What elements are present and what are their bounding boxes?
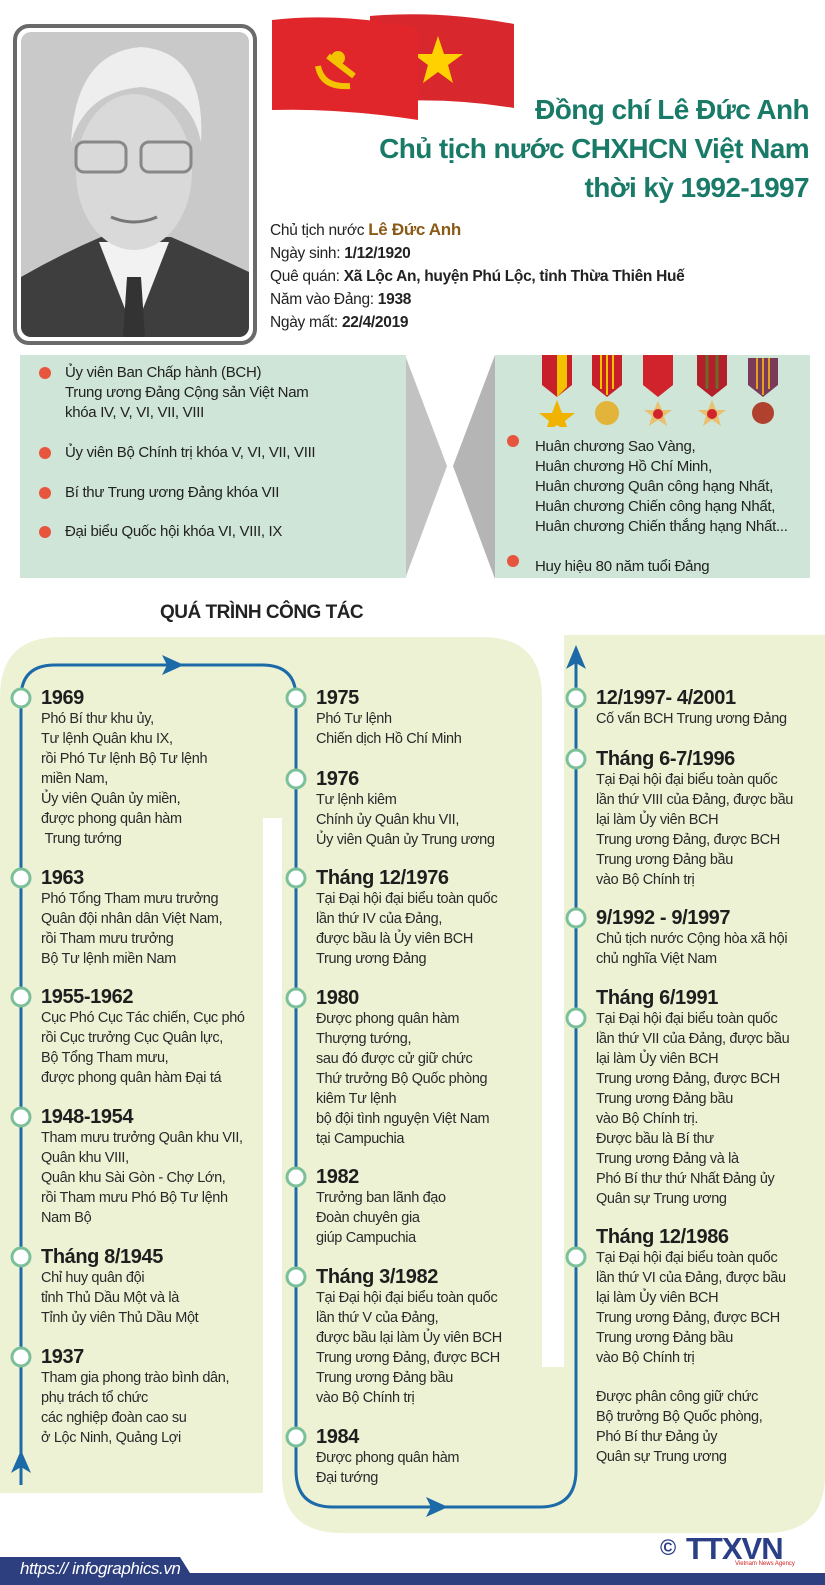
- text: 1980: [316, 987, 359, 1009]
- timeline: right column: [596, 687, 787, 727]
- logo: TTXVN: ©: [660, 1535, 676, 1560]
- text: Trưởng ban lãnh đạo: [316, 1190, 446, 1206]
- panel: awards: Huân chương Quân công hạng Nhất,: [535, 478, 773, 495]
- text: 9/1992 - 9/1997: [596, 907, 730, 929]
- text: được bầu lại làm Ủy viên BCH: [316, 1330, 502, 1346]
- timeline: left column: Ủy viên Quân ủy miền,: [41, 791, 180, 807]
- text: phụ trách tổ chức: [41, 1390, 148, 1406]
- panel: awards: Huân chương Hồ Chí Minh,: [535, 458, 712, 475]
- title: thời kỳ 1992-1997: [584, 172, 809, 203]
- text: Trung ương Đảng bầu: [596, 1091, 733, 1107]
- panel: awards: Huy hiệu 80 năm tuổi Đảng: [535, 558, 709, 575]
- heading: quá trình công tác: QUÁ TRÌNH CÔNG TÁC: [160, 602, 363, 623]
- connector X shape: [405, 355, 495, 579]
- timeline: left column: Tư lệnh Quân khu IX,: [41, 731, 173, 747]
- panel: positions: Ủy viên Ban Chấp hành (BCH): [65, 364, 261, 381]
- text: Tháng 12/1986: [596, 1226, 729, 1248]
- text: Tháng 8/1945: [41, 1246, 163, 1268]
- panel: positions: Ủy viên Bộ Chính trị khóa V, VI, VII, VIII: [65, 444, 315, 461]
- text: 1982: [316, 1166, 359, 1188]
- panel: positions: Trung ương Đảng Cộng sản Việt Nam: [65, 384, 308, 401]
- panel: awards: Huân chương Chiến công hạng Nhất,: [535, 498, 775, 515]
- title: [379, 94, 809, 203]
- text: Quân khu VIII,: [41, 1150, 129, 1166]
- text: Chủ tịch nước Cộng hòa xã hội: [596, 931, 787, 947]
- logo: TTXVN: TTXVN: [686, 1531, 783, 1566]
- text: Bộ Tổng Tham mưu,: [41, 1050, 168, 1066]
- panel: awards: Huân chương Chiến thắng hạng Nhất...: [535, 518, 788, 535]
- text: Quân sự Trung ương: [596, 1449, 727, 1465]
- personal info: Năm vào Đảng: 1938: [270, 291, 411, 308]
- text: Bộ Tư lệnh miền Nam: [41, 951, 176, 967]
- text: Thứ trưởng Bộ Quốc phòng: [316, 1071, 487, 1087]
- text: 1948-1954: [41, 1106, 133, 1128]
- text: bộ đội tình nguyện Việt Nam: [316, 1111, 489, 1127]
- text: Trung ương Đảng và là: [596, 1151, 739, 1167]
- text: lần thứ IV của Đảng,: [316, 911, 442, 927]
- personal info: Ngày sinh: 1/12/1920: [270, 245, 411, 262]
- text: được phong quân hàm Đại tá: [41, 1070, 221, 1086]
- text: vào Bộ Chính trị: [596, 1350, 694, 1366]
- timeline: middle column: Chiến dịch Hồ Chí Minh: [316, 731, 461, 747]
- flag: vietnam: [370, 14, 514, 108]
- text: Quân đội nhân dân Việt Nam,: [41, 911, 222, 927]
- text: 1984: [316, 1426, 359, 1448]
- text: Được bầu là Bí thư: [596, 1131, 714, 1147]
- text: Trung ương Đảng, được BCH: [316, 1350, 500, 1366]
- timeline: right column: Cố vấn BCH Trung ương Đảng: [596, 711, 787, 727]
- text: vào Bộ Chính trị: [596, 872, 694, 888]
- footer: [0, 1557, 825, 1585]
- timeline: left column: [41, 687, 207, 847]
- timeline: middle column: [316, 687, 461, 747]
- personal info: Quê quán: Xã Lộc An, huyện Phú Lộc, tỉnh Thừa Thiên Huế: [270, 268, 684, 285]
- text: 1937: [41, 1346, 84, 1368]
- panel: positions: [20, 355, 406, 578]
- text: Bộ trưởng Bộ Quốc phòng,: [596, 1409, 762, 1425]
- text: lại làm Ủy viên BCH: [596, 1290, 718, 1306]
- icon: medals: [539, 355, 778, 427]
- text: Nam Bộ: [41, 1210, 91, 1226]
- flag: party: [272, 17, 418, 120]
- text: sau đó được cử giữ chức: [316, 1051, 472, 1067]
- text: giúp Campuchia: [316, 1230, 416, 1246]
- title: Chủ tịch nước CHXHCN Việt Nam: [379, 133, 809, 164]
- timeline: left column: Trung tướng: [45, 831, 122, 847]
- text: lần thứ VII của Đảng, được bầu: [596, 1031, 789, 1047]
- timeline: middle column: Phó Tư lệnh: [316, 711, 392, 727]
- text: Tại Đại hội đại biểu toàn quốc: [316, 891, 497, 907]
- text: tỉnh Thủ Dầu Một và là: [41, 1290, 179, 1306]
- text: vào Bộ Chính trị.: [596, 1111, 698, 1127]
- text: lần thứ VIII của Đảng, được bầu: [596, 792, 793, 808]
- text: Chính ủy Quân khu VII,: [316, 812, 459, 828]
- text: 1963: [41, 867, 84, 889]
- text: các nghiệp đoàn cao su: [41, 1410, 186, 1426]
- text: Ủy viên Quân ủy Trung ương: [316, 832, 495, 848]
- text: rồi Tham mưu trưởng: [41, 931, 173, 947]
- text: Trung ương Đảng, được BCH: [596, 832, 780, 848]
- timeline: left column: được phong quân hàm: [41, 811, 182, 827]
- text: lần thứ V của Đảng,: [316, 1310, 438, 1326]
- flags: [272, 14, 514, 120]
- text: Trung ương Đảng bầu: [596, 852, 733, 868]
- text: vào Bộ Chính trị: [316, 1390, 414, 1406]
- footer: https:// infographics.vn: [20, 1559, 180, 1578]
- text: Quân sự Trung ương: [596, 1191, 727, 1207]
- text: Tại Đại hội đại biểu toàn quốc: [596, 1011, 777, 1027]
- timeline: left column: rồi Phó Tư lệnh Bộ Tư lệnh: [41, 751, 207, 767]
- text: Cục Phó Cục Tác chiến, Cục phó: [41, 1010, 245, 1026]
- text: Thượng tướng,: [316, 1031, 411, 1047]
- text: được bầu là Ủy viên BCH: [316, 931, 473, 947]
- text: Tháng 3/1982: [316, 1266, 438, 1288]
- text: Phó Tổng Tham mưu trưởng: [41, 891, 218, 907]
- timeline: left column: Phó Bí thư khu ủy,: [41, 711, 154, 727]
- text: lần thứ VI của Đảng, được bầu: [596, 1270, 786, 1286]
- title: Đồng chí Lê Đức Anh: [535, 94, 809, 125]
- panel: awards: [495, 355, 810, 578]
- text: Trung ương Đảng, được BCH: [596, 1310, 780, 1326]
- logo: TTXVN: Vietnam News Agency: [735, 1561, 795, 1567]
- text: rồi Cục trưởng Cục Quân lực,: [41, 1030, 223, 1046]
- text: lại làm Ủy viên BCH: [596, 812, 718, 828]
- text: Tư lệnh kiêm: [316, 792, 396, 808]
- personal info: [270, 220, 685, 331]
- timeline: right column: 12/1997- 4/2001: [596, 687, 736, 709]
- text: Được phong quân hàm: [316, 1011, 459, 1027]
- text: Tháng 12/1976: [316, 867, 449, 889]
- text: 1955-1962: [41, 986, 133, 1008]
- text: kiêm Tư lệnh: [316, 1091, 396, 1107]
- text: Tham gia phong trào bình dân,: [41, 1370, 229, 1386]
- text: Phó Bí thư Đảng ủy: [596, 1429, 717, 1445]
- text: Phó Bí thư thứ Nhất Đảng ủy: [596, 1171, 774, 1187]
- text: 1976: [316, 768, 359, 790]
- text: Tại Đại hội đại biểu toàn quốc: [596, 772, 777, 788]
- panel: positions: Đại biểu Quốc hội khóa VI, VIII, IX: [65, 523, 282, 540]
- text: Trung ương Đảng, được BCH: [596, 1071, 780, 1087]
- text: rồi Tham mưu Phó Bộ Tư lệnh: [41, 1190, 228, 1206]
- portrait photo: [13, 24, 257, 345]
- text: Trung ương Đảng bầu: [316, 1370, 453, 1386]
- text: Tháng 6/1991: [596, 987, 718, 1009]
- text: Được phân công giữ chức: [596, 1389, 758, 1405]
- text: Tỉnh ủy viên Thủ Dầu Một: [41, 1310, 198, 1326]
- text: Tham mưu trưởng Quân khu VII,: [41, 1130, 243, 1146]
- panel: positions: khóa IV, V, VI, VII, VIII: [65, 404, 204, 421]
- panel: positions: Bí thư Trung ương Đảng khóa VII: [65, 484, 279, 501]
- timeline: middle column: 1975: [316, 687, 359, 709]
- text: lại làm Ủy viên BCH: [596, 1051, 718, 1067]
- personal info: Chủ tịch nước Lê Đức Anh: [270, 220, 461, 239]
- logo: TTXVN: [660, 1531, 795, 1567]
- personal info: Ngày mất: 22/4/2019: [270, 314, 408, 331]
- text: Chỉ huy quân đội: [41, 1270, 144, 1286]
- text: Được phong quân hàm: [316, 1450, 459, 1466]
- text: ở Lộc Ninh, Quảng Lợi: [41, 1430, 181, 1446]
- text: Đại tướng: [316, 1470, 378, 1486]
- timeline: left column: 1969: [41, 687, 84, 709]
- text: Tháng 6-7/1996: [596, 748, 735, 770]
- text: Trung ương Đảng: [316, 951, 426, 967]
- timeline: left column: miền Nam,: [41, 771, 108, 787]
- panel: awards: Huân chương Sao Vàng,: [535, 438, 695, 455]
- text: Đoàn chuyên gia: [316, 1210, 420, 1226]
- text: chủ nghĩa Việt Nam: [596, 951, 717, 967]
- text: Tại Đại hội đại biểu toàn quốc: [596, 1250, 777, 1266]
- text: tại Campuchia: [316, 1131, 404, 1147]
- text: Quân khu Sài Gòn - Chợ Lớn,: [41, 1170, 225, 1186]
- text: Tại Đại hội đại biểu toàn quốc: [316, 1290, 497, 1306]
- text: Trung ương Đảng bầu: [596, 1330, 733, 1346]
